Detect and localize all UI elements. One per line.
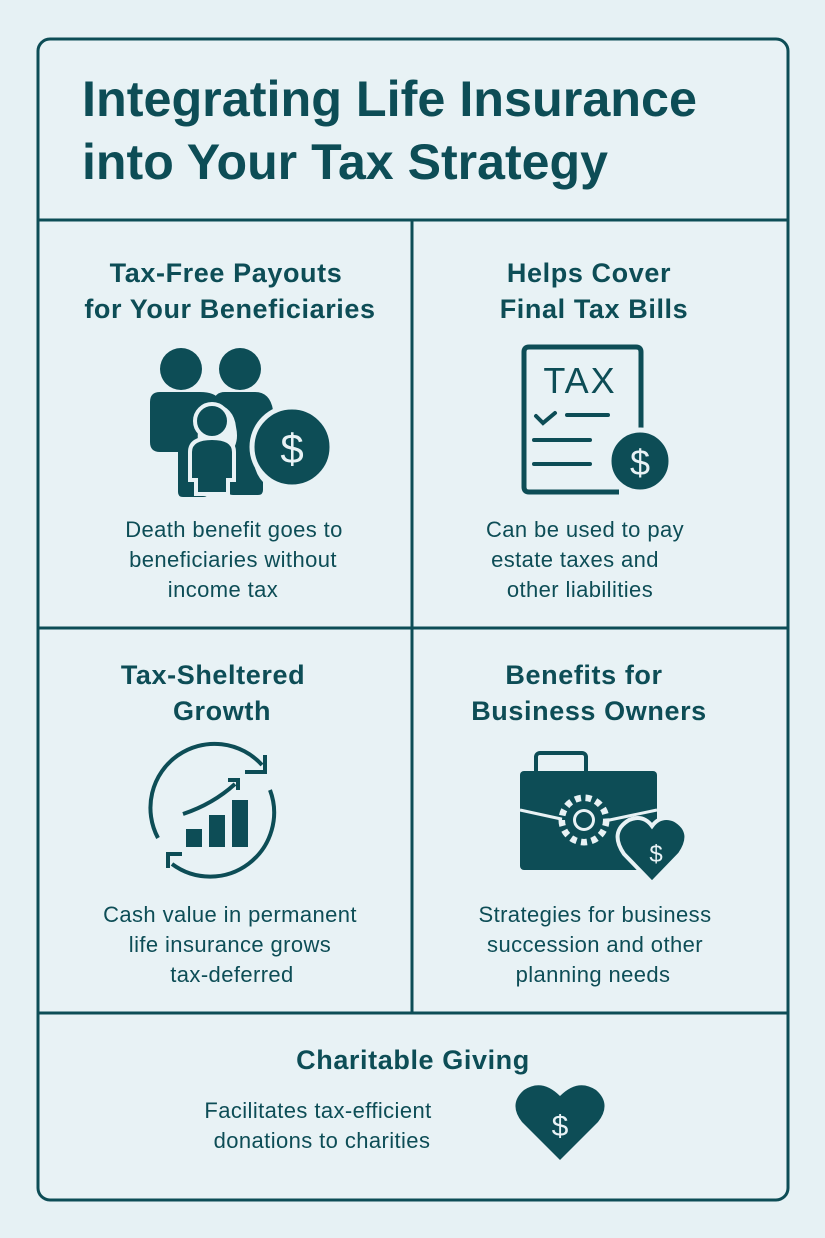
icon: growth cycle bbox=[150, 744, 274, 877]
panel: final tax bills: Final Tax Bills bbox=[500, 294, 688, 324]
panel: final tax bills: Helps Cover bbox=[507, 258, 671, 288]
panel: business owners: succession and other bbox=[487, 932, 703, 957]
icon: family with dollar: $ bbox=[280, 425, 304, 472]
panel: charitable giving: Facilitates tax-efficient bbox=[204, 1098, 432, 1123]
panel: final tax bills: estate taxes and bbox=[491, 547, 659, 572]
panel: charitable giving: donations to charities bbox=[214, 1128, 430, 1153]
icon: tax document: TAX bbox=[543, 360, 617, 401]
title: Integrating Life Insurance bbox=[82, 71, 697, 127]
panel: tax-free payouts bbox=[84, 258, 376, 602]
panel: tax-sheltered growth: Tax-Sheltered bbox=[121, 660, 305, 690]
panel: tax-sheltered growth: life insurance grows bbox=[129, 932, 331, 957]
text: Cash value in permanent bbox=[103, 902, 357, 927]
panel: final tax bills: other liabilities bbox=[507, 577, 653, 602]
panel: tax-sheltered growth bbox=[103, 660, 357, 987]
icon: heart with dollar: $ bbox=[552, 1110, 569, 1143]
icon: briefcase with gear and heart: $ bbox=[649, 841, 663, 868]
panel: tax-sheltered growth: tax-deferred bbox=[170, 962, 294, 987]
panel: charitable giving: Charitable Giving bbox=[296, 1045, 530, 1075]
panel: charitable giving bbox=[204, 1045, 605, 1160]
panel: final tax bills bbox=[486, 258, 688, 602]
panel: tax-free payouts: beneficiaries without bbox=[129, 547, 337, 572]
icon: tax document: $ bbox=[630, 442, 650, 483]
text: Death benefit goes to bbox=[125, 517, 343, 542]
icon: heart with dollar bbox=[515, 1085, 605, 1160]
icon: briefcase with gear and heart bbox=[520, 753, 686, 883]
panel: tax-free payouts: Tax-Free Payouts bbox=[110, 258, 342, 288]
text: Strategies for business bbox=[479, 902, 711, 927]
icon: tax document bbox=[524, 347, 671, 492]
title bbox=[82, 71, 697, 190]
panel: business owners bbox=[471, 660, 711, 987]
panel: tax-sheltered growth: Growth bbox=[173, 696, 271, 726]
panel: business owners: planning needs bbox=[516, 962, 670, 987]
panel: tax-free payouts: income tax bbox=[168, 577, 278, 602]
panel: business owners: Business Owners bbox=[471, 696, 707, 726]
text: Can be used to pay bbox=[486, 517, 684, 542]
icon: family with dollar bbox=[150, 348, 332, 497]
panel: tax-free payouts: for Your Beneficiaries bbox=[84, 294, 376, 324]
panel: business owners: Benefits for bbox=[505, 660, 663, 690]
title: into Your Tax Strategy bbox=[82, 134, 608, 190]
